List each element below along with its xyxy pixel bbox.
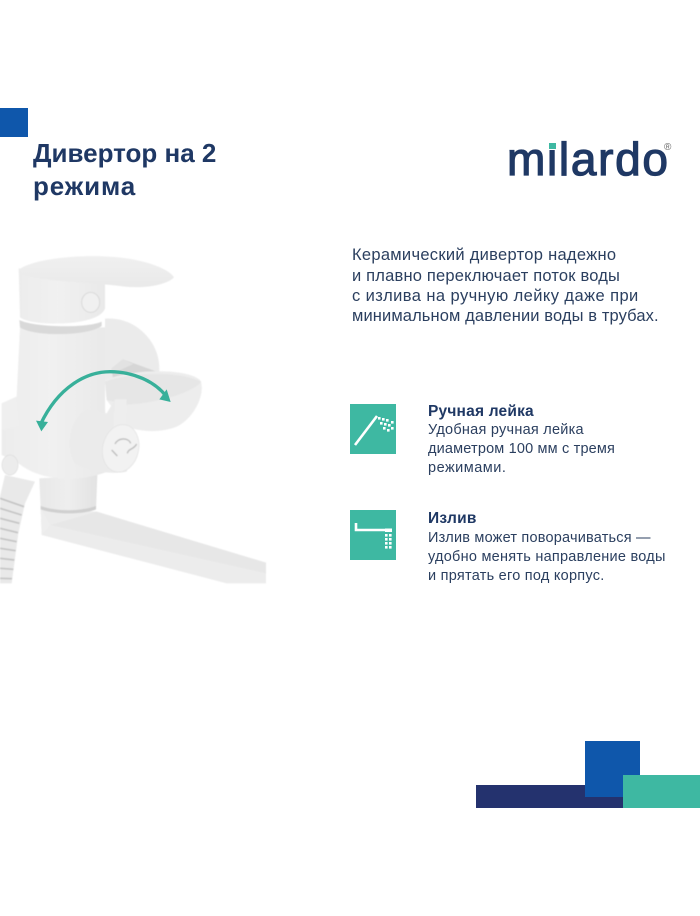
intro text: Керамический дивертор надежно — [352, 246, 616, 264]
text: spout: и прятать его под корпус. — [428, 568, 604, 584]
text: spout — [428, 530, 666, 584]
faucet body — [2, 256, 174, 513]
heading: spout: Излив — [428, 510, 477, 527]
shower hose — [0, 455, 35, 583]
title: режима — [33, 171, 136, 201]
navy bar — [476, 785, 623, 808]
heading: hand shower: Ручная лейка — [428, 403, 534, 420]
text: hand shower — [428, 422, 615, 476]
text: spout: Излив может поворачиваться — — [428, 530, 651, 546]
title — [33, 138, 216, 201]
wall bracket — [105, 318, 202, 431]
text: hand shower: режимами. — [428, 460, 506, 476]
spout — [41, 508, 266, 583]
intro text: минимальном давлении воды в трубах. — [352, 307, 659, 325]
intro text: и плавно переключает поток воды — [352, 266, 620, 284]
corner accent square — [0, 108, 28, 137]
decorative corner blocks — [476, 741, 700, 808]
icon: spout — [350, 510, 396, 560]
intro text: с излива на ручную лейку даже при — [352, 287, 639, 305]
text: spout: удобно менять направление воды — [428, 549, 666, 565]
feature: hand shower — [350, 403, 615, 476]
text: hand shower: диаметром 100 мм с тремя — [428, 441, 615, 457]
faucet illustration with diverter arrow — [0, 256, 266, 584]
blue square — [585, 741, 640, 797]
arrow: two-way rotation — [36, 372, 171, 431]
diverter knob — [69, 399, 143, 476]
title: Дивертор на 2 — [33, 138, 216, 168]
icon: hand shower — [350, 404, 396, 454]
intro text — [352, 246, 659, 325]
feature: spout — [350, 510, 666, 584]
text: hand shower: Удобная ручная лейка — [428, 422, 584, 438]
teal bar — [623, 775, 700, 808]
logo: milardo: ® — [664, 142, 672, 153]
